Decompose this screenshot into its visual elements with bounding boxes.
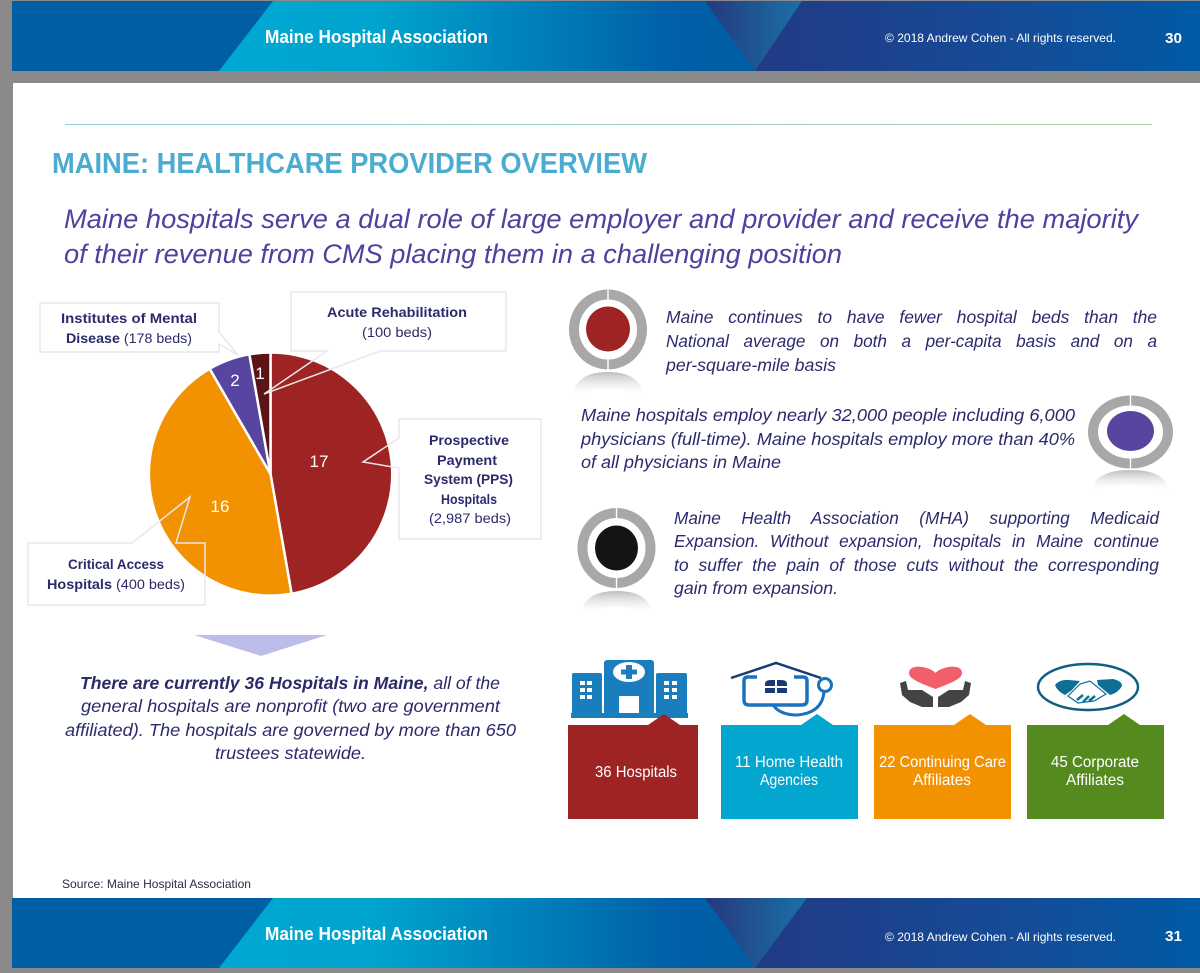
text block: hospital employment [580, 405, 1075, 472]
header banner: © 2018 Andrew Cohen - All rights reserved. [885, 31, 1116, 45]
icon: hospital building [571, 660, 688, 718]
slice: critical access 16 [149, 369, 292, 596]
callout: critical access hospitals: Hospitals (400 beds) [47, 576, 185, 592]
title: MAINE: HEALTHCARE PROVIDER OVERVIEW [52, 148, 647, 180]
callout: prospective payment system hospitals [363, 419, 541, 539]
icon: black ring bullet [581, 507, 652, 615]
text block: medicaid expansion: gain from expansion. [674, 578, 838, 598]
callout: critical access hospitals [28, 497, 205, 605]
text block: hospital summary: general hospitals are nonprofit (two are government [81, 696, 501, 716]
text block: medicaid expansion: Maine Health Association (MHA) supporting Medicaid [674, 508, 1160, 528]
text block: hospital employment: of all physicians in Maine [581, 452, 781, 472]
footer banner [12, 898, 1200, 968]
callout: institutes of mental disease: Institutes of Mental [61, 310, 197, 326]
pie value labels: 1 [255, 364, 265, 383]
pie value labels [211, 364, 328, 516]
stat box: 22 continuing care affiliates: Affiliates [913, 772, 971, 789]
text block: hospital employment: Maine hospitals employ nearly 32,000 people including 6,000 [581, 405, 1075, 425]
callout: prospective payment system hospitals: Hospitals [441, 491, 497, 507]
icon: heart in hands [900, 667, 971, 707]
stat box: 11 home health agencies: 11 Home Health [735, 754, 843, 771]
stat box: 45 corporate affiliates: Affiliates [1066, 772, 1124, 789]
header banner: Maine Hospital Association [265, 26, 488, 47]
subtitle [64, 204, 1140, 269]
pie value labels: 16 [211, 497, 229, 516]
callout: prospective payment system hospitals: Prospective [429, 432, 509, 448]
text block: fewer hospital beds: per-square-mile basis [665, 355, 836, 375]
footer banner: 31 [1165, 928, 1182, 945]
text block: hospital summary: There are currently 36 Hospitals in Maine, all of the [80, 673, 500, 693]
callout: critical access hospitals: Critical Access [68, 556, 164, 572]
text block: hospital summary [65, 673, 516, 763]
subtitle: Maine hospitals serve a dual role of large employer and provider and receive the majority [64, 204, 1140, 234]
text block: hospital summary: affiliated). The hospitals are governed by more than 650 [65, 720, 516, 740]
slice: PPS hospitals 17 [270, 352, 392, 594]
pie value labels: 2 [230, 371, 240, 390]
pie chart: hospitals by type [149, 352, 392, 596]
source note: Source: Maine Hospital Association [62, 877, 251, 891]
footer banner: © 2018 Andrew Cohen - All rights reserved. [885, 930, 1116, 944]
text block: fewer hospital beds [665, 307, 1157, 375]
text block: medicaid expansion: Expansion. Without expansion, hospitals in Maine continue [674, 531, 1159, 551]
callout: institutes of mental disease: Disease (178 beds) [66, 330, 192, 346]
subtitle: of their revenue from CMS placing them in a challenging position [64, 239, 842, 269]
callout: prospective payment system hospitals: System (PPS) [424, 471, 513, 487]
arrow: down to summary [194, 635, 327, 656]
callout: prospective payment system hospitals: Payment [437, 452, 497, 468]
stat box: 11 home health agencies: Agencies [760, 772, 818, 789]
callout: acute rehabilitation: Acute Rehabilitation [327, 304, 467, 320]
icon: red ring bullet [573, 289, 643, 397]
stat box: 11 home health agencies [721, 714, 858, 819]
callout: institutes of mental disease [40, 303, 238, 355]
stat box: 45 corporate affiliates: 45 Corporate [1051, 754, 1139, 771]
icon: purple ring bullet [1092, 395, 1169, 492]
callout: acute rehabilitation: (100 beds) [362, 324, 432, 340]
text block: fewer hospital beds: Maine continues to have fewer hospital beds than the [666, 307, 1157, 327]
footer banner: Maine Hospital Association [265, 923, 488, 944]
stat box: 45 corporate affiliates [1027, 714, 1164, 819]
text block: medicaid expansion [674, 508, 1160, 598]
callout: prospective payment system hospitals: (2,987 beds) [429, 510, 511, 526]
icon: handshake in oval [1038, 664, 1138, 710]
pie value labels: 17 [310, 452, 328, 471]
stat box: 36 hospitals: 36 Hospitals [595, 764, 677, 781]
text block: hospital summary: trustees statewide. [215, 743, 366, 763]
slice: acute rehab 1 [249, 352, 270, 474]
slice: mental disease 2 [210, 354, 270, 474]
header banner [12, 1, 1200, 71]
stat box: 22 continuing care affiliates: 22 Continuing Care [879, 754, 1006, 771]
text block: fewer hospital beds: National average on both a per-capita basis and on a [666, 331, 1157, 351]
text block: hospital employment: physicians (full-time). Maine hospitals employ more than 40% [580, 429, 1075, 449]
icon: home with stethoscope [731, 663, 832, 715]
stat box: 36 hospitals [568, 714, 698, 819]
stat box: 22 continuing care affiliates [874, 714, 1011, 819]
text block: medicaid expansion: to suffer the pain of those cuts without the corresponding [674, 555, 1159, 575]
header banner: 30 [1165, 30, 1182, 47]
callout: acute rehabilitation [264, 292, 506, 394]
